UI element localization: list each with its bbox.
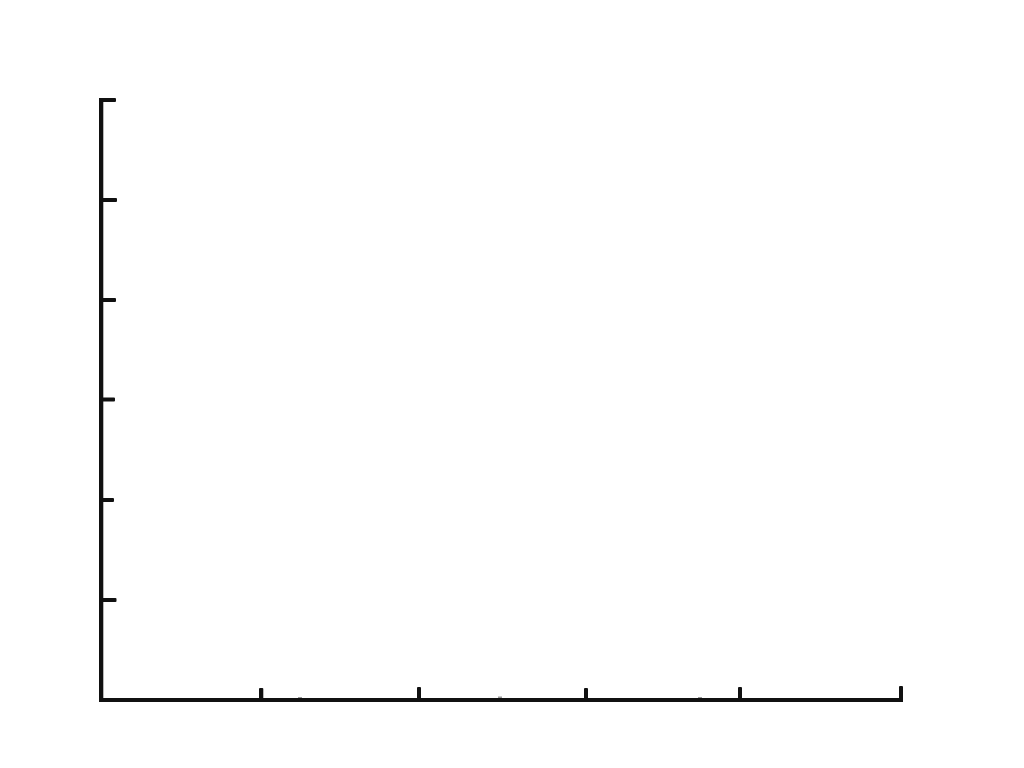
- x axis with tick marks: [99, 686, 903, 702]
- y axis with tick marks: [99, 98, 117, 702]
